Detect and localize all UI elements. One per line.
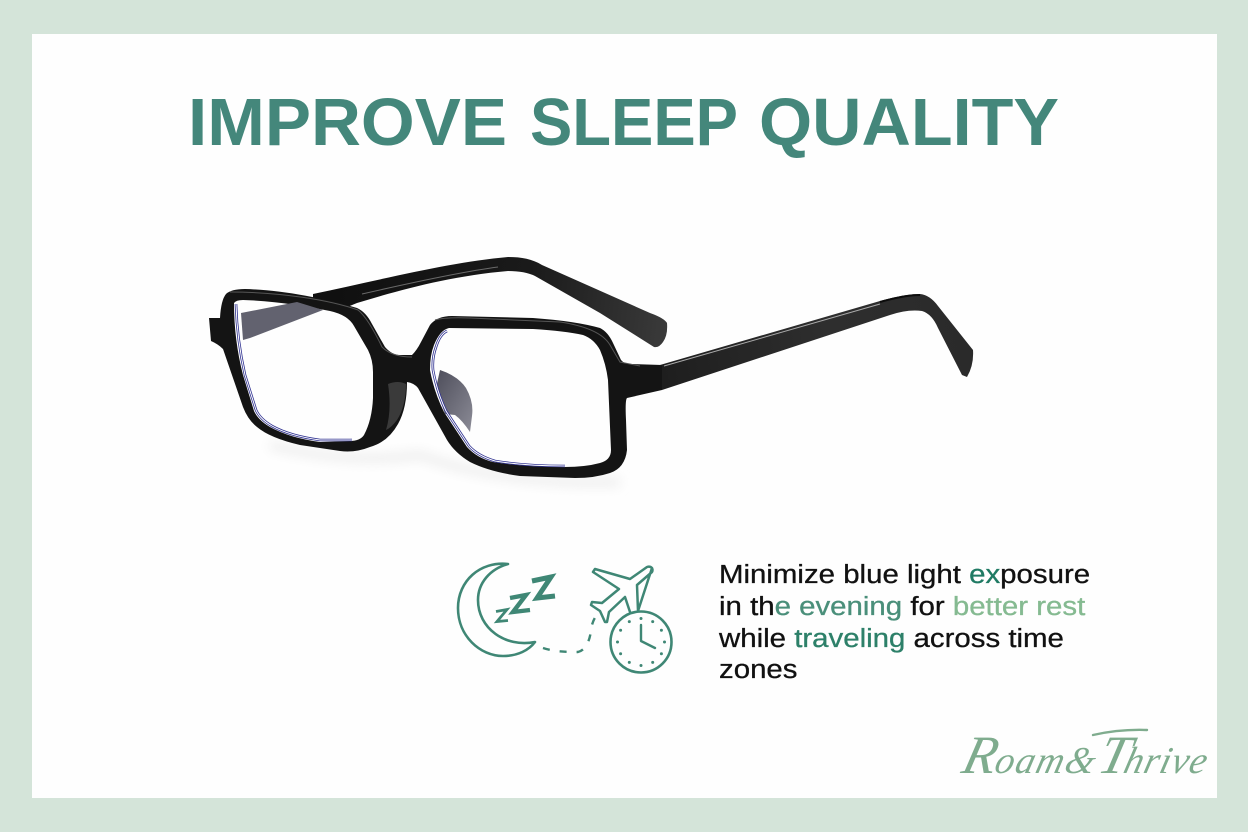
far temple highlight xyxy=(362,267,498,294)
temple seen through left lens xyxy=(241,302,323,340)
caption text: while xyxy=(718,624,794,653)
icon: crescent moon xyxy=(458,564,535,656)
near temple arm xyxy=(660,294,973,390)
left lens white edge xyxy=(236,304,352,440)
far temple arm xyxy=(313,257,667,347)
caption text: zones xyxy=(719,655,797,684)
soft ground shadow xyxy=(270,445,620,482)
dashed flight path xyxy=(543,616,596,652)
frame front xyxy=(209,289,662,478)
signature text: T xyxy=(1093,725,1142,785)
signature text: R xyxy=(956,725,1005,785)
right lens white edge xyxy=(433,331,565,466)
caption text: in th xyxy=(719,592,775,621)
icon: small z xyxy=(496,610,508,622)
icon: large z xyxy=(532,577,555,598)
title xyxy=(188,85,1059,160)
near temple highlight xyxy=(664,304,880,366)
title: QUALITY xyxy=(759,85,1059,160)
title: SLEEP xyxy=(530,85,738,160)
icon: airplane xyxy=(591,567,652,622)
signature text: hrive xyxy=(1120,741,1213,782)
caption text: e evening for better rest xyxy=(775,592,1085,621)
nose pad xyxy=(436,370,472,432)
caption text: Minimize blue light xyxy=(719,560,969,589)
clock hands xyxy=(641,625,655,648)
frame rim highlight xyxy=(230,292,640,366)
icon: moon, sleep, plane and clock xyxy=(458,564,672,672)
right lens blue edge xyxy=(433,331,565,466)
glasses illustration xyxy=(209,257,973,482)
caption text: traveling across time xyxy=(794,624,1064,653)
brand signature xyxy=(956,725,1217,785)
caption text: exposure xyxy=(969,560,1090,589)
signature T bar flourish xyxy=(1093,730,1147,735)
left lens blue edge xyxy=(236,304,352,440)
near temple top edge xyxy=(880,295,920,302)
icon: medium z xyxy=(510,595,530,612)
clock ticks xyxy=(640,617,642,620)
title: IMPROVE xyxy=(188,85,507,160)
signature text: oam& xyxy=(991,741,1102,782)
left nose pad gloss xyxy=(386,382,406,430)
icon: clock xyxy=(610,612,672,672)
clock face xyxy=(610,612,672,672)
